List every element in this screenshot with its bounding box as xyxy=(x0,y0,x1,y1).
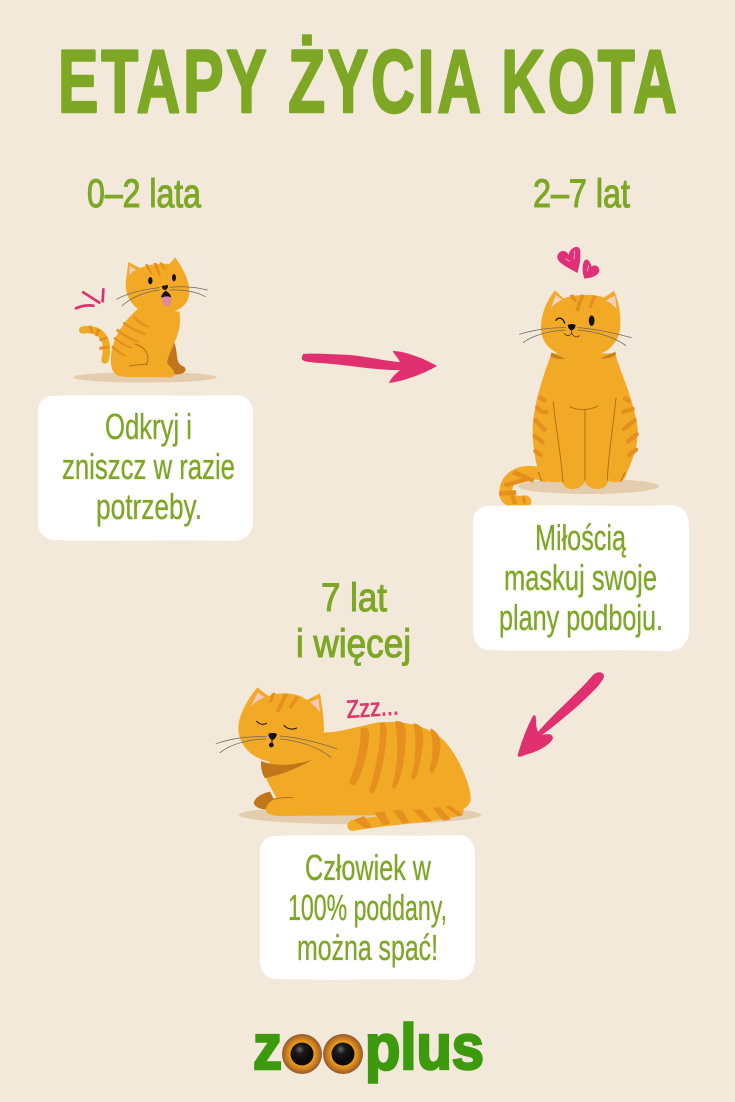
box: kitten caption xyxy=(38,395,253,541)
box: senior caption xyxy=(260,835,475,980)
kitten illustration xyxy=(73,257,217,383)
logo: zooplus xyxy=(253,1011,484,1083)
arrow: kitten to adult xyxy=(302,351,437,383)
adult cat illustration xyxy=(499,247,659,504)
box: adult caption: plany podboju. xyxy=(499,597,663,638)
box: senior caption: Człowiek w xyxy=(305,847,432,888)
age label: 2-7 lat: 2–7 lat xyxy=(533,172,630,216)
icon: hearts xyxy=(557,247,599,279)
senior cat illustration xyxy=(216,687,481,829)
box: senior caption: można spać! xyxy=(297,927,438,968)
box: senior caption: 100% poddany, xyxy=(288,887,447,928)
age label: 7 lat i więcej: i więcej xyxy=(296,622,411,666)
age label: 7 lat i więcej: 7 lat xyxy=(321,576,387,620)
title: ETAPY ŻYCIA KOTA xyxy=(58,32,677,132)
age label: 0-2 lata: 0–2 lata xyxy=(87,172,202,216)
zzz label: Zzz... xyxy=(345,692,399,724)
box: kitten caption: zniszcz w razie xyxy=(62,446,235,487)
box: adult caption xyxy=(473,505,689,651)
box: adult caption: Miłością xyxy=(535,517,627,558)
box: kitten caption: potrzeby. xyxy=(96,486,202,527)
arrow: adult to senior xyxy=(518,672,604,757)
logo: zooplus: plus xyxy=(365,1011,484,1083)
age label: 7 lat i więcej xyxy=(296,576,411,666)
box: kitten caption: Odkryj i xyxy=(105,406,192,447)
box: adult caption: maskuj swoje xyxy=(504,557,657,598)
logo: zooplus: z xyxy=(253,1011,282,1083)
